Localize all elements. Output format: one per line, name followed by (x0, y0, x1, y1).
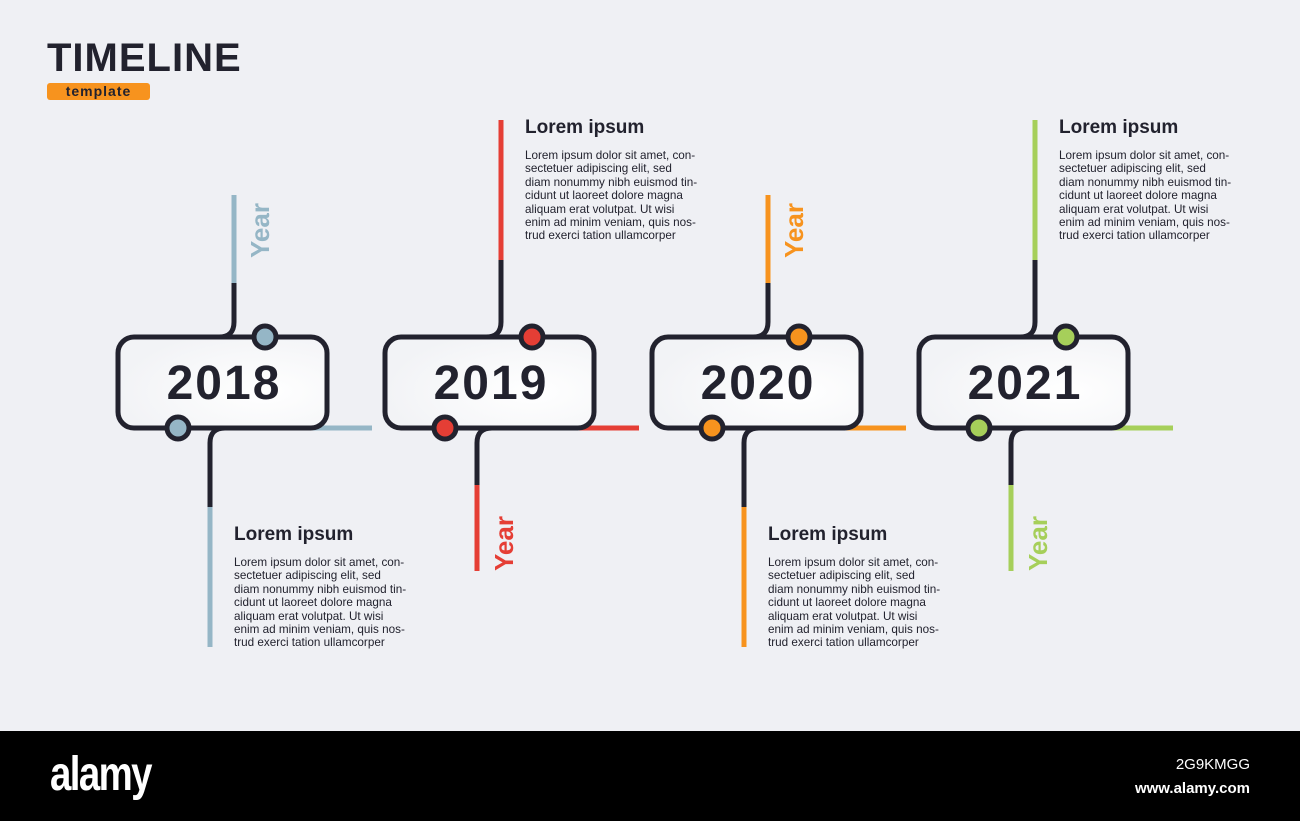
text: 2018: Lorem ipsum dolor sit amet, con- (234, 556, 404, 569)
unit 2020 (652, 195, 906, 647)
text: 2019: Lorem ipsum dolor sit amet, con- (525, 149, 695, 162)
text: 2020: Lorem ipsum (768, 524, 887, 545)
text: 2020 (768, 524, 940, 649)
unit 2021 (919, 120, 1173, 571)
text: 2021: aliquam erat volutpat. Ut wisi (1059, 203, 1208, 216)
text: 2020: trud exerci tation ullamcorper (768, 636, 919, 649)
text: 2021: sectetuer adipiscing elit, sed (1059, 162, 1206, 175)
text: 2018: enim ad minim veniam, quis nos- (234, 623, 405, 636)
text: 2018 (234, 524, 406, 649)
footer logo: alamy (50, 748, 151, 801)
footer band (0, 731, 1300, 821)
text: 2020: cidunt ut laoreet dolore magna (768, 596, 926, 609)
text: 2021: enim ad minim veniam, quis nos- (1059, 216, 1230, 229)
text: 2021 (1059, 117, 1231, 242)
text: 2019: cidunt ut laoreet dolore magna (525, 189, 683, 202)
text: 2020: enim ad minim veniam, quis nos- (768, 623, 939, 636)
footer ids: 2G9KMGG (1176, 756, 1250, 773)
unit 2018: 2018 (167, 357, 281, 410)
unit 2021: 2021 (968, 357, 1082, 410)
title (47, 36, 242, 100)
text: 2018: sectetuer adipiscing elit, sed (234, 569, 381, 582)
text: 2019: sectetuer adipiscing elit, sed (525, 162, 672, 175)
unit 2019: 2019 (434, 357, 548, 410)
text: 2020: diam nonummy nibh euismod tin- (768, 583, 940, 596)
unit 2021: Year (1023, 516, 1053, 571)
unit 2020: Year (779, 203, 809, 258)
unit 2019 (385, 120, 639, 571)
text: 2019: diam nonummy nibh euismod tin- (525, 176, 697, 189)
text: 2021: cidunt ut laoreet dolore magna (1059, 189, 1217, 202)
text: 2020: sectetuer adipiscing elit, sed (768, 569, 915, 582)
text: 2018: Lorem ipsum (234, 524, 353, 545)
text: 2021: Lorem ipsum dolor sit amet, con- (1059, 149, 1229, 162)
subtitle tag: template (66, 83, 131, 99)
text: 2021: Lorem ipsum (1059, 117, 1178, 138)
text: 2021: trud exerci tation ullamcorper (1059, 229, 1210, 242)
unit 2018: Year (245, 203, 275, 258)
text: 2019 (525, 117, 697, 242)
text: 2018: aliquam erat volutpat. Ut wisi (234, 610, 383, 623)
text: 2019: trud exerci tation ullamcorper (525, 229, 676, 242)
text: 2018: cidunt ut laoreet dolore magna (234, 596, 392, 609)
text: 2018: trud exerci tation ullamcorper (234, 636, 385, 649)
unit 2019: Year (489, 516, 519, 571)
unit 2020: 2020 (701, 357, 815, 410)
text: 2021: diam nonummy nibh euismod tin- (1059, 176, 1231, 189)
text: 2020: Lorem ipsum dolor sit amet, con- (768, 556, 938, 569)
text: 2020: aliquam erat volutpat. Ut wisi (768, 610, 917, 623)
unit 2018 (118, 195, 372, 647)
text: 2019: enim ad minim veniam, quis nos- (525, 216, 696, 229)
subtitle tag (47, 83, 150, 100)
footer ids (1135, 756, 1250, 797)
footer ids: www.alamy.com (1135, 780, 1250, 797)
title: TIMELINE (47, 36, 242, 80)
text: 2018: diam nonummy nibh euismod tin- (234, 583, 406, 596)
text: 2019: Lorem ipsum (525, 117, 644, 138)
text: 2019: aliquam erat volutpat. Ut wisi (525, 203, 674, 216)
